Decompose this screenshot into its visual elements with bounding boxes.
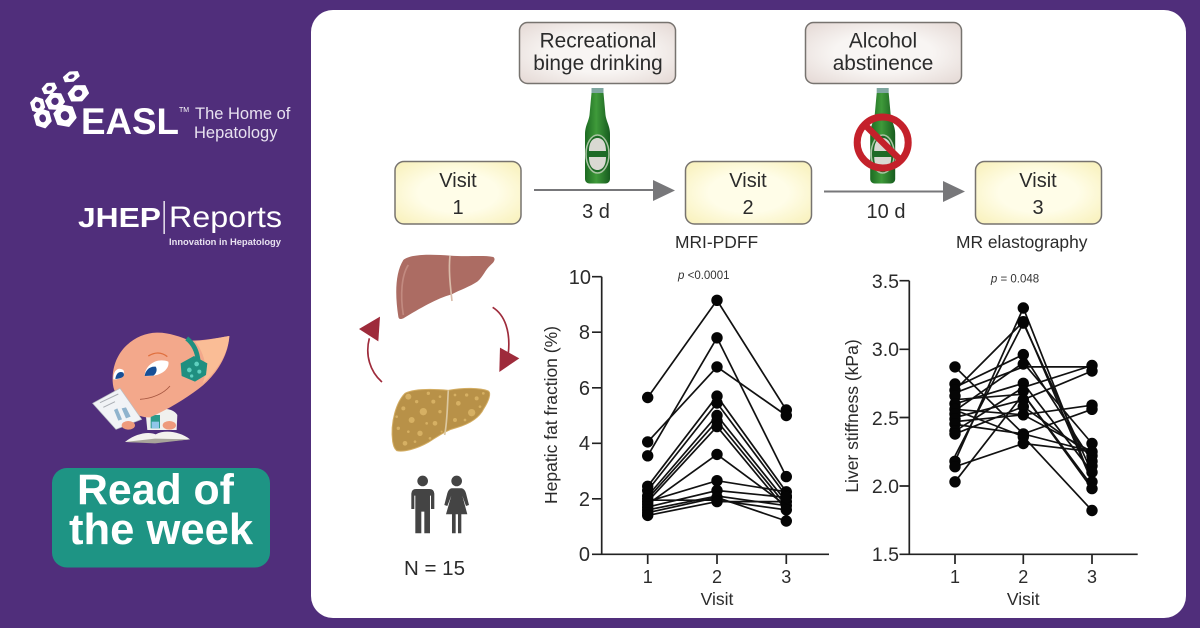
chart axes (900, 281, 1138, 564)
y tick labels: 3.5 (872, 271, 899, 293)
paired lines (648, 300, 786, 521)
JHEP wordmark: JHEP (78, 202, 161, 233)
y axis title: Hepatic fat fraction (%) (541, 326, 561, 504)
label: MRI-PDFF: MRI-PDFF (675, 232, 758, 252)
paired lines (955, 308, 1092, 510)
y tick labels: 4 (579, 433, 590, 455)
icon: beer bottle (585, 88, 610, 184)
box: Visit 1: 1 (452, 197, 464, 219)
x tick labels (950, 567, 1097, 587)
chart: liver stiffness (842, 271, 1138, 609)
EASL wordmark: EASL (81, 101, 179, 142)
p value: p <0.0001 (677, 270, 730, 282)
icon: crossed-out beer bottle (857, 88, 908, 184)
y axis title: Liver stiffness (kPa) (842, 339, 862, 493)
EASL logo (30, 69, 291, 142)
trademark: TM (179, 107, 189, 114)
mascot eyes (145, 360, 169, 376)
mascot hands (122, 421, 135, 430)
p value: p = 0.048 (990, 274, 1039, 286)
callout: Read of the week (52, 466, 270, 568)
box: Alcohol abstinence (806, 22, 962, 84)
y tick labels: 1.5 (872, 544, 899, 566)
x tick labels: 3 (1087, 567, 1097, 587)
y tick labels: 8 (579, 322, 590, 344)
arrow: visit 1 to visit 2 (534, 180, 675, 201)
mascot headphones (187, 338, 198, 362)
mascot book (125, 432, 190, 443)
icon: man and woman (411, 476, 469, 533)
mascot body (146, 409, 177, 430)
x tick labels (643, 567, 791, 587)
panel: white content card (311, 10, 1186, 618)
box: Visit 3 (976, 162, 1102, 224)
arrow: healthy to fatty liver (493, 307, 519, 372)
label: 3 days: 3 d (582, 201, 610, 223)
icon: hexagon cluster (30, 69, 90, 129)
x axis title: Visit (701, 589, 734, 609)
x tick labels: 1 (643, 567, 653, 587)
box: Recreational binge drinking (520, 22, 676, 84)
mascot lobe (195, 336, 229, 383)
box: Visit 1 (395, 162, 521, 224)
tagline second line: Hepatology (194, 124, 278, 142)
arrow: visit 2 to visit 3 (824, 181, 965, 202)
callout line 2: the week (69, 506, 254, 554)
logo divider (164, 201, 165, 234)
box: Visit 3: Visit (1019, 170, 1057, 192)
icon: healthy liver (396, 255, 495, 319)
box: Alcohol abstinence: abstinence (833, 52, 933, 75)
label: sample size: N = 15 (404, 557, 465, 580)
data points (949, 302, 1098, 516)
mascot paper (93, 388, 142, 429)
chart axes (592, 277, 829, 564)
chart: hepatic fat fraction (541, 267, 829, 609)
box: Visit 2: Visit (729, 170, 767, 192)
x tick labels: 3 (781, 567, 791, 587)
callout line 1: Read of (77, 466, 235, 514)
label: MR elastography: MR elastography (956, 232, 1088, 252)
y tick labels: 2.5 (872, 408, 899, 430)
man (411, 476, 434, 533)
x tick labels: 2 (712, 567, 722, 587)
mascot head (113, 333, 229, 417)
y tick labels: 2 (579, 489, 590, 511)
data points (642, 295, 792, 527)
Reports wordmark: Reports (169, 201, 282, 234)
y tick labels: 2.0 (872, 476, 899, 498)
journal tagline: Innovation in Hepatology (169, 237, 281, 247)
icon: fatty liver (392, 388, 490, 451)
box: Visit 2: 2 (742, 197, 754, 219)
y tick labels (569, 267, 591, 566)
box: Recreational binge drinking: Recreational (540, 30, 656, 52)
label: 10 days: 10 d (867, 201, 905, 223)
icon: liver mascot reading (93, 333, 229, 443)
box: Visit 3: 3 (1032, 197, 1044, 219)
y tick labels: 3.0 (872, 339, 899, 361)
y tick labels: 0 (579, 544, 590, 566)
tagline: The Home of (195, 105, 291, 123)
arrow: fatty to healthy liver (359, 317, 382, 382)
y tick labels (872, 271, 899, 566)
x axis title: Visit (1007, 589, 1040, 609)
x tick labels: 1 (950, 567, 960, 587)
JHEP Reports logo (78, 201, 282, 247)
box: Visit 2 (686, 162, 812, 224)
y tick labels: 6 (579, 378, 590, 400)
box: Recreational binge drinking: binge drinking (533, 52, 663, 75)
x tick labels: 2 (1018, 567, 1028, 587)
box: Alcohol abstinence: Alcohol (849, 30, 917, 52)
y tick labels: 10 (569, 267, 591, 289)
woman (444, 476, 469, 533)
box: Visit 1: Visit (439, 170, 477, 192)
